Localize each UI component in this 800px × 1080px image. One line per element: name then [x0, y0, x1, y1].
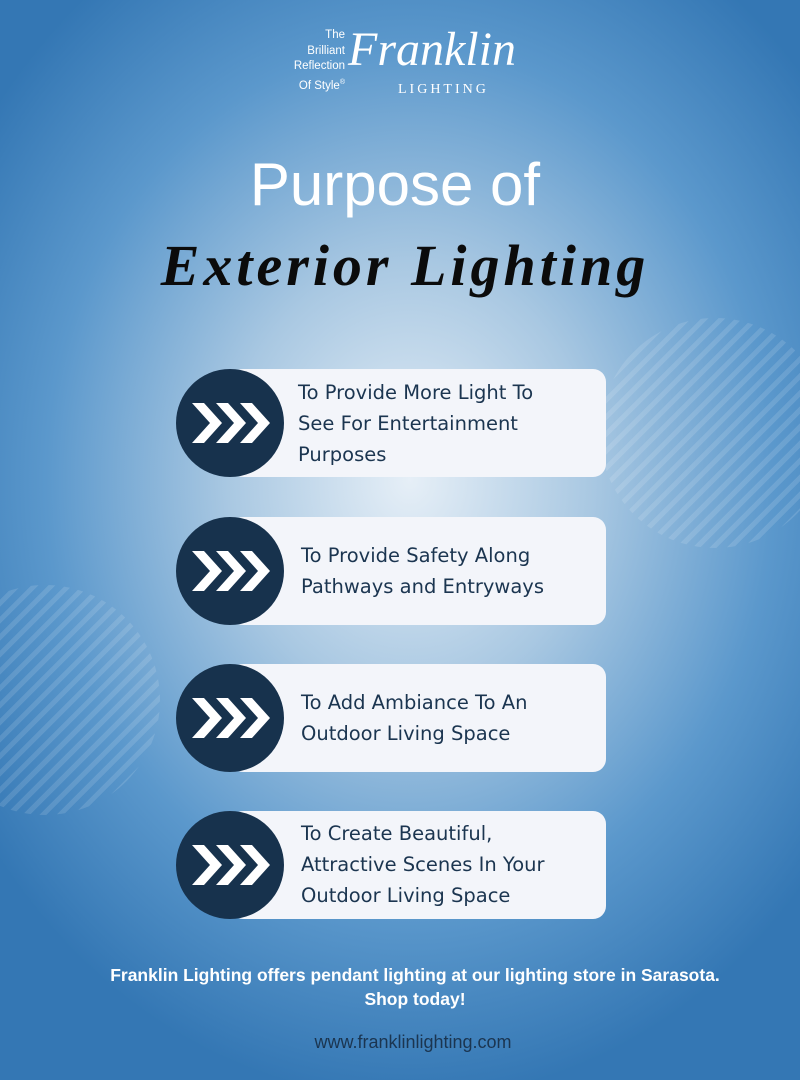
logo: LIGHTING — [398, 82, 489, 97]
logo: The — [325, 29, 345, 41]
logo — [294, 23, 516, 97]
item 2: To Provide Safety Along Pathways and Entryways — [301, 544, 544, 598]
item 1 — [176, 369, 606, 477]
logo: Franklin — [348, 23, 516, 76]
url: www.franklinlighting.com — [314, 1032, 512, 1052]
footer text: Shop today! — [364, 989, 466, 1009]
footer text: Franklin Lighting offers pendant lighting at our lighting store in Sarasota. — [110, 965, 720, 985]
item 3: To Add Ambiance To An Outdoor Living Space — [301, 691, 527, 745]
footer text — [110, 965, 720, 1009]
item 4 — [176, 811, 606, 919]
logo: Of Style® — [299, 78, 345, 91]
title: Purpose of — [250, 151, 540, 218]
item 1: To Provide More Light To See For Entertainment Purposes — [298, 381, 533, 466]
item 2 — [176, 517, 606, 625]
item 4: To Create Beautiful, Attractive Scenes In Your Outdoor Living Space — [301, 822, 545, 907]
logo: Reflection — [294, 60, 345, 72]
logo: Brilliant — [307, 44, 345, 56]
item 3 — [176, 664, 606, 772]
subtitle script: Exterior Lighting — [161, 233, 649, 298]
